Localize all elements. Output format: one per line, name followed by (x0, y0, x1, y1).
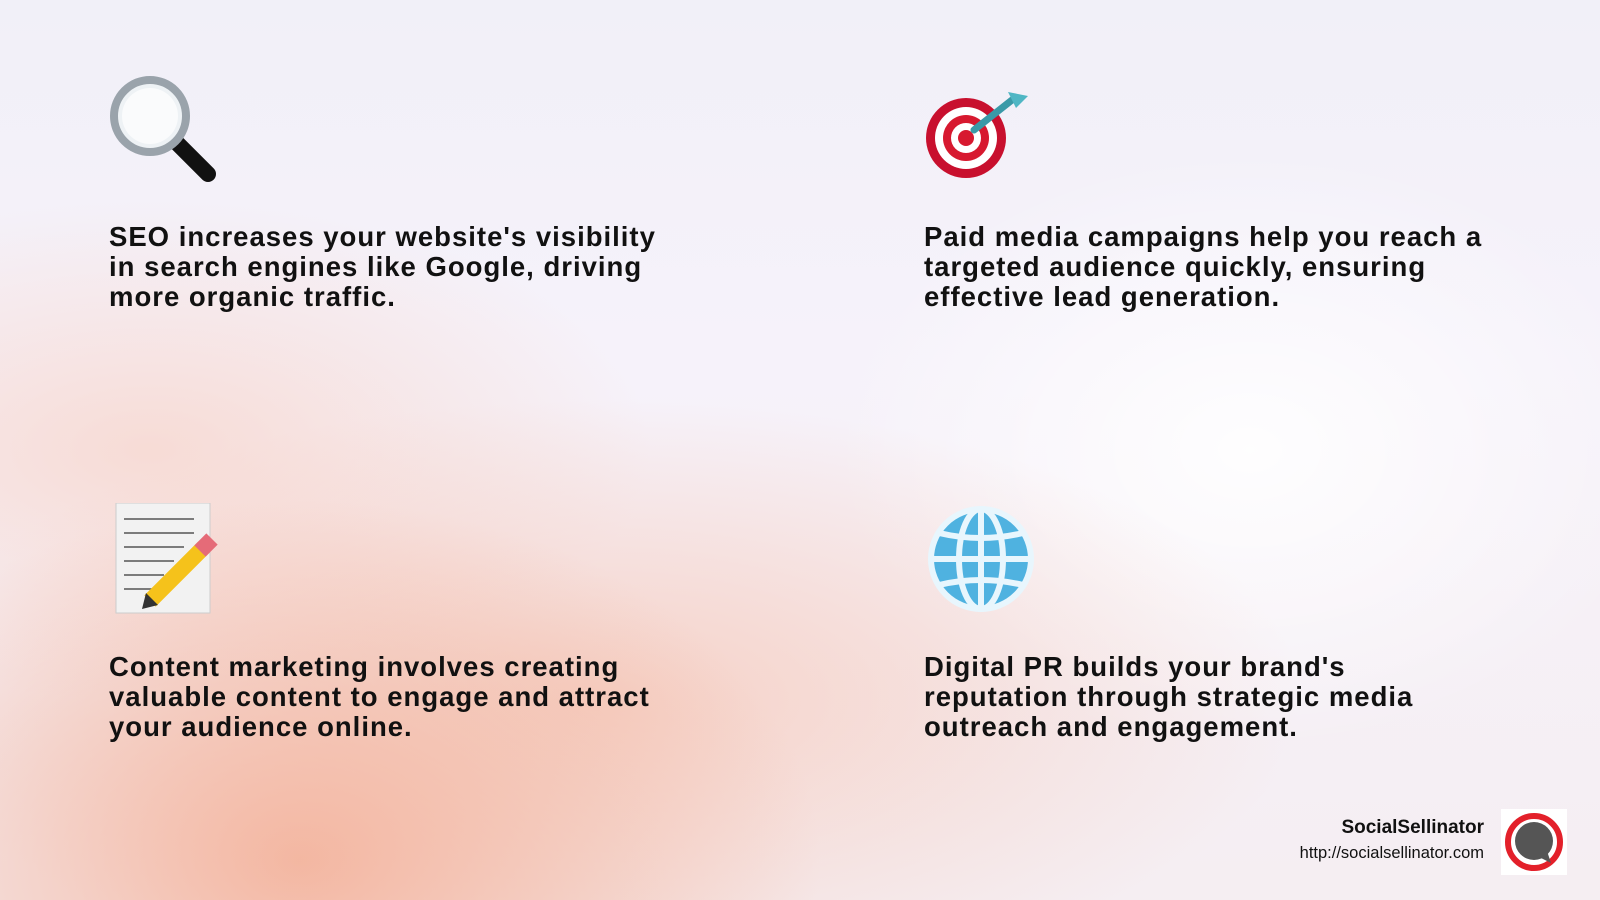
footer brand: SocialSellinator (1341, 817, 1484, 838)
text: content marketing: Content marketing involves creating (109, 651, 619, 682)
text: digital PR: reputation through strategic media (924, 681, 1413, 712)
text: content marketing: your audience online. (109, 711, 413, 742)
text: SEO (109, 221, 656, 312)
text: paid media: targeted audience quickly, ensuring (924, 251, 1426, 282)
icon: globe (928, 506, 1034, 612)
text: paid media (924, 221, 1482, 312)
icon: memo with pencil (116, 503, 218, 614)
text: paid media: Paid media campaigns help you reach a (924, 221, 1482, 252)
text: SEO: in search engines like Google, driving (109, 251, 642, 282)
logo (1501, 809, 1567, 875)
icon: target (926, 92, 1028, 178)
text: digital PR: Digital PR builds your brand's (924, 651, 1346, 682)
footer brand (1300, 817, 1484, 862)
text: digital PR (924, 651, 1413, 742)
text: paid media: effective lead generation. (924, 281, 1280, 312)
footer brand: http://socialsellinator.com (1300, 844, 1484, 862)
text: digital PR: outreach and engagement. (924, 711, 1298, 742)
text: SEO: more organic traffic. (109, 281, 396, 312)
text: content marketing (109, 651, 650, 742)
icon: magnifying glass (110, 76, 216, 182)
text: content marketing: valuable content to engage and attract (109, 681, 650, 712)
text: SEO: SEO increases your website's visibility (109, 221, 656, 252)
